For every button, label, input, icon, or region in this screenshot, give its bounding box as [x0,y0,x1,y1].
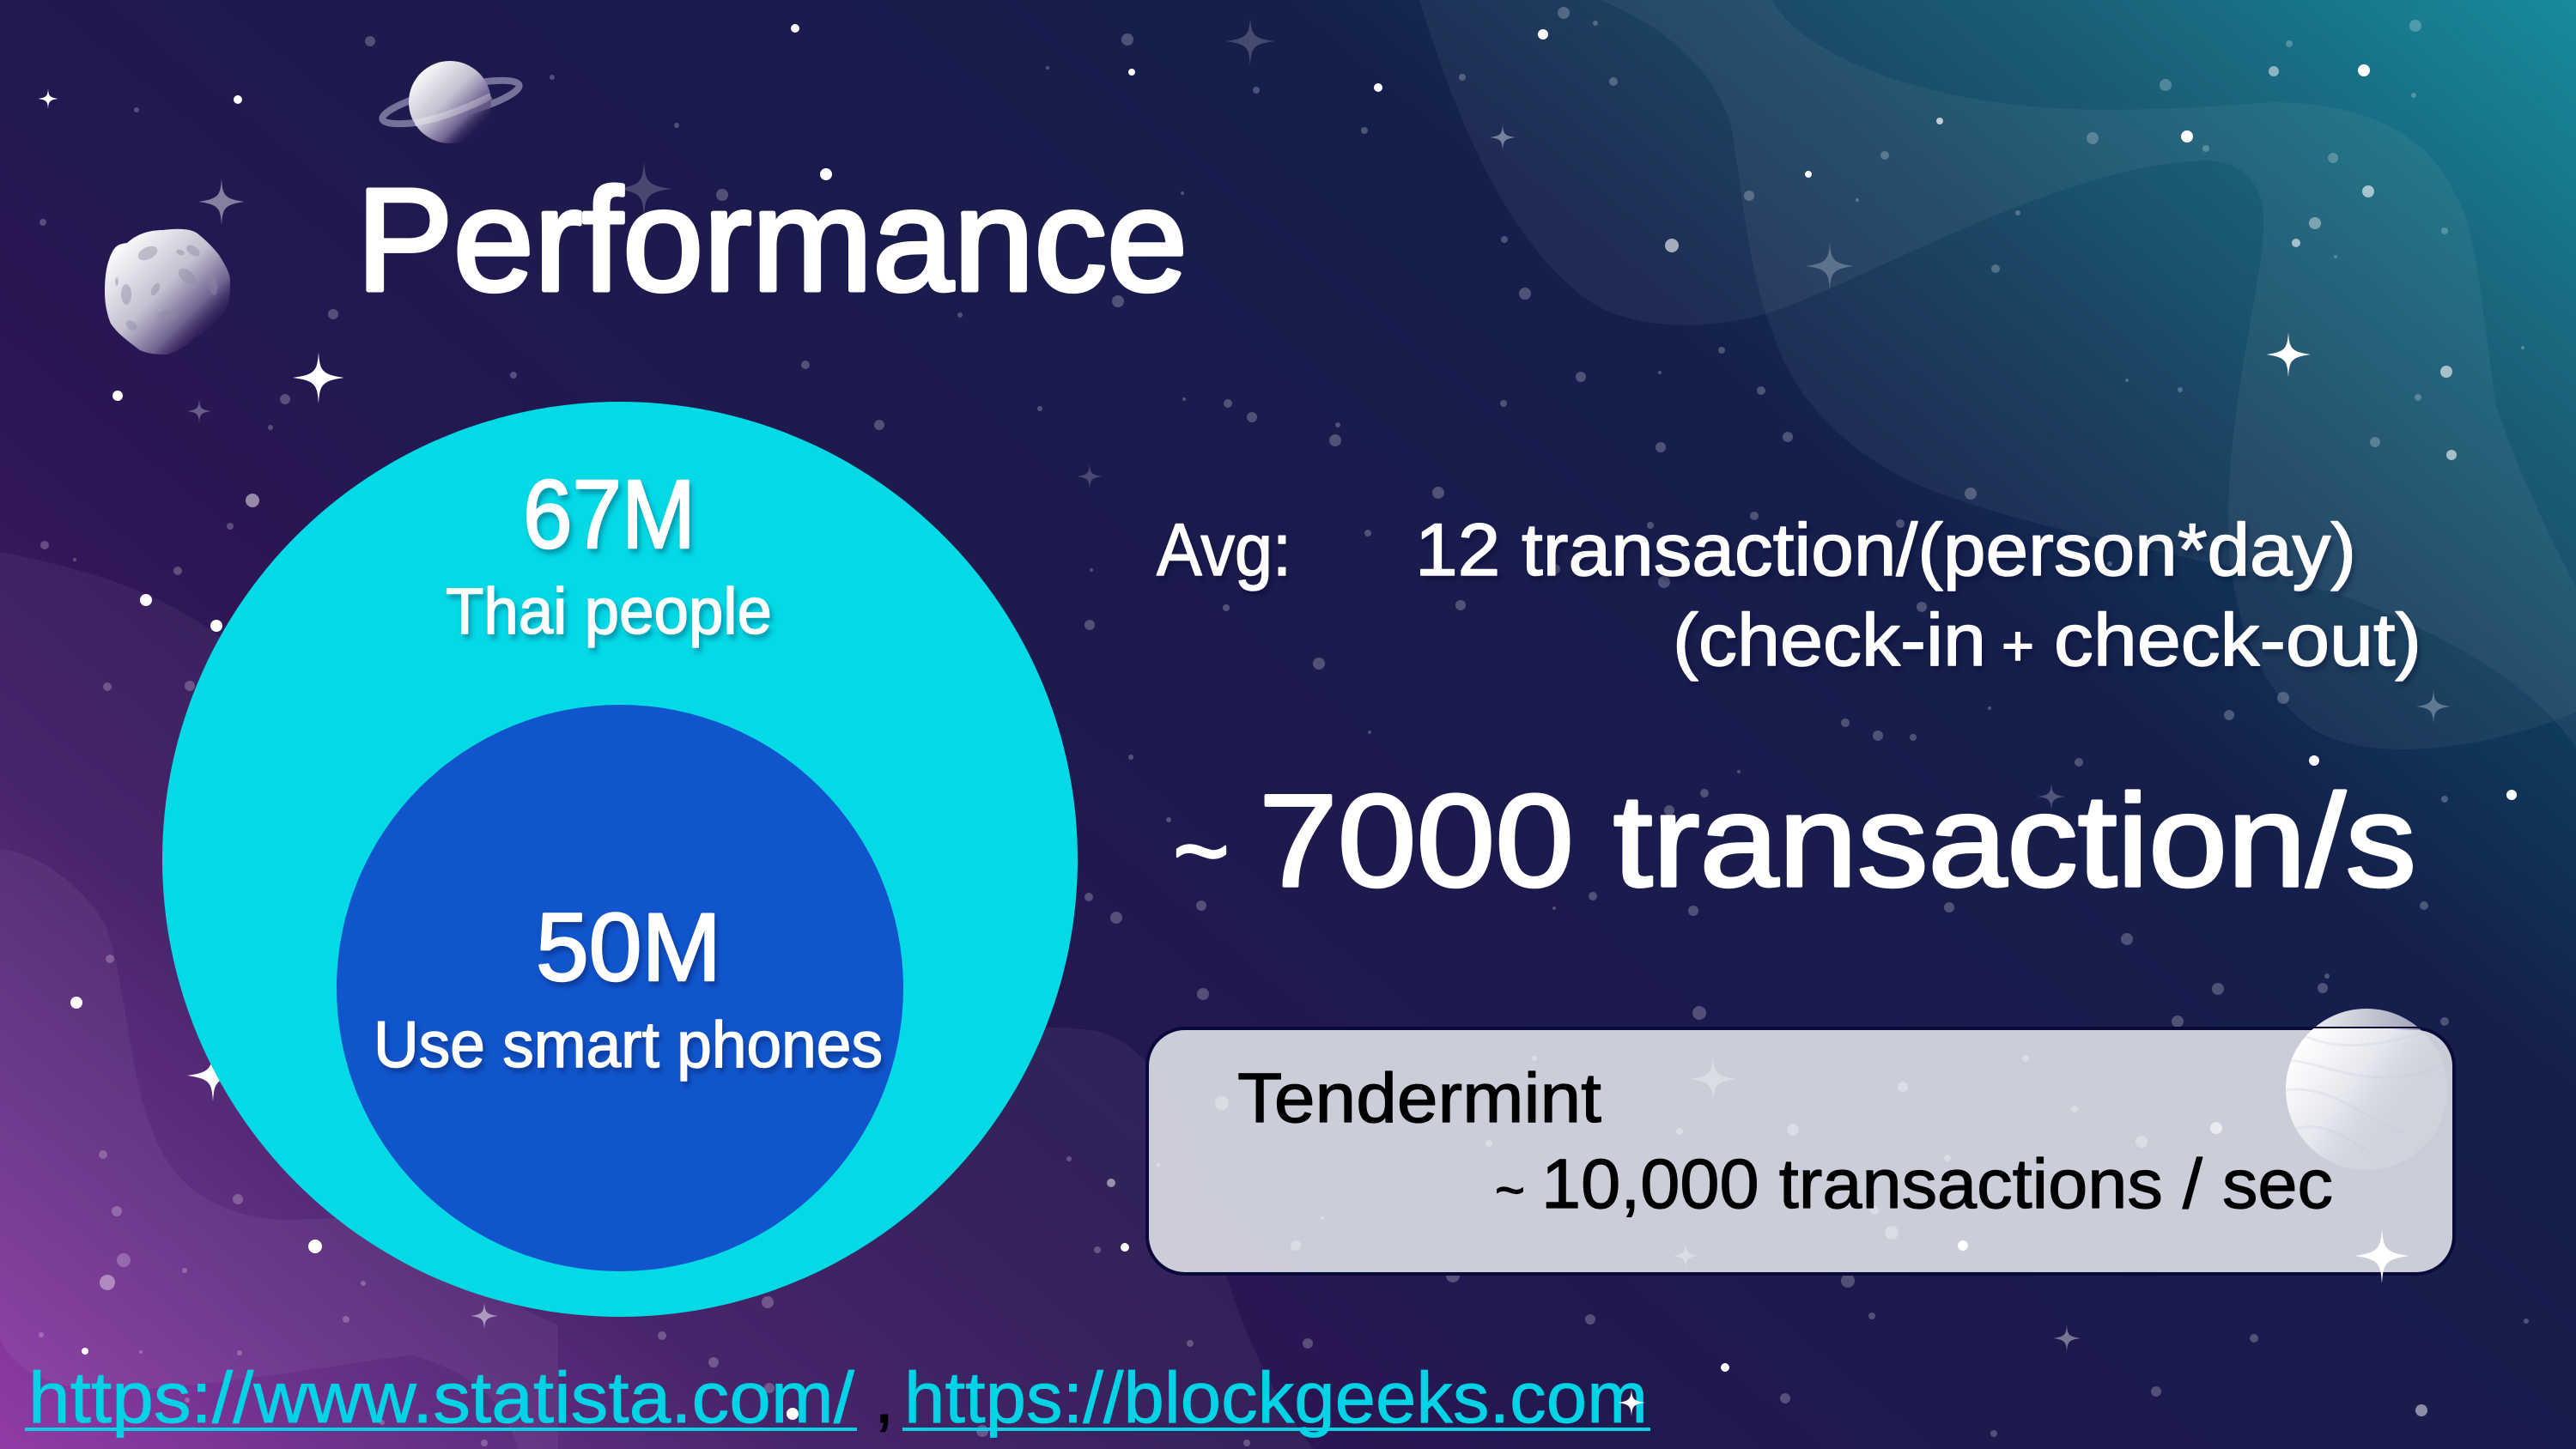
label: Thai people: Thai people [446,575,772,648]
text: Tendermint: Tendermint [1237,1059,1601,1137]
icon: pale planet behind box [2286,1009,2447,1170]
faint stars seen through panel [1157,1055,2222,1269]
title: Performance [356,159,1188,322]
link: blockgeeks: https://blockgeeks.com [904,1357,1648,1438]
stat: 67M: 67M [523,460,696,568]
label: Use smart phones: Use smart phones [374,1009,883,1082]
text: check-in and check-out: + [2002,614,2034,677]
sources: links [25,1357,1650,1438]
stat: 50M: 50M [536,894,721,1001]
text: 7000 transactions per second: 7000 transaction/s [1259,767,2416,914]
planet highlight [2286,1028,2421,1156]
outer circle: Thai people [162,402,1078,1317]
icon: cratered moon [105,229,230,355]
text: check-in and check-out [1673,599,2421,682]
icon: ringed planet [380,61,522,143]
text: check-in and check-out: check-out) [2054,599,2421,682]
text: 7000 transactions per second: ~ [1173,793,1230,908]
text: check-in and check-out: (check-in [1673,599,1986,682]
text: 10,000 transactions per second: 10,000 transactions / sec [1541,1145,2333,1223]
text: 10,000 transactions per second: ~ [1495,1161,1525,1219]
link: statista: https://www.statista.com/ [28,1357,855,1438]
comma separator: , [874,1357,894,1438]
panel: Tendermint [1147,1009,2454,1274]
foreground sparkles and dots [787,1228,2409,1420]
text: transactions per person per day: 12 transaction/(person*day) [1415,509,2356,591]
inner circle: smart phone users [337,705,903,1271]
text: Avg label: Avg: [1157,509,1291,591]
